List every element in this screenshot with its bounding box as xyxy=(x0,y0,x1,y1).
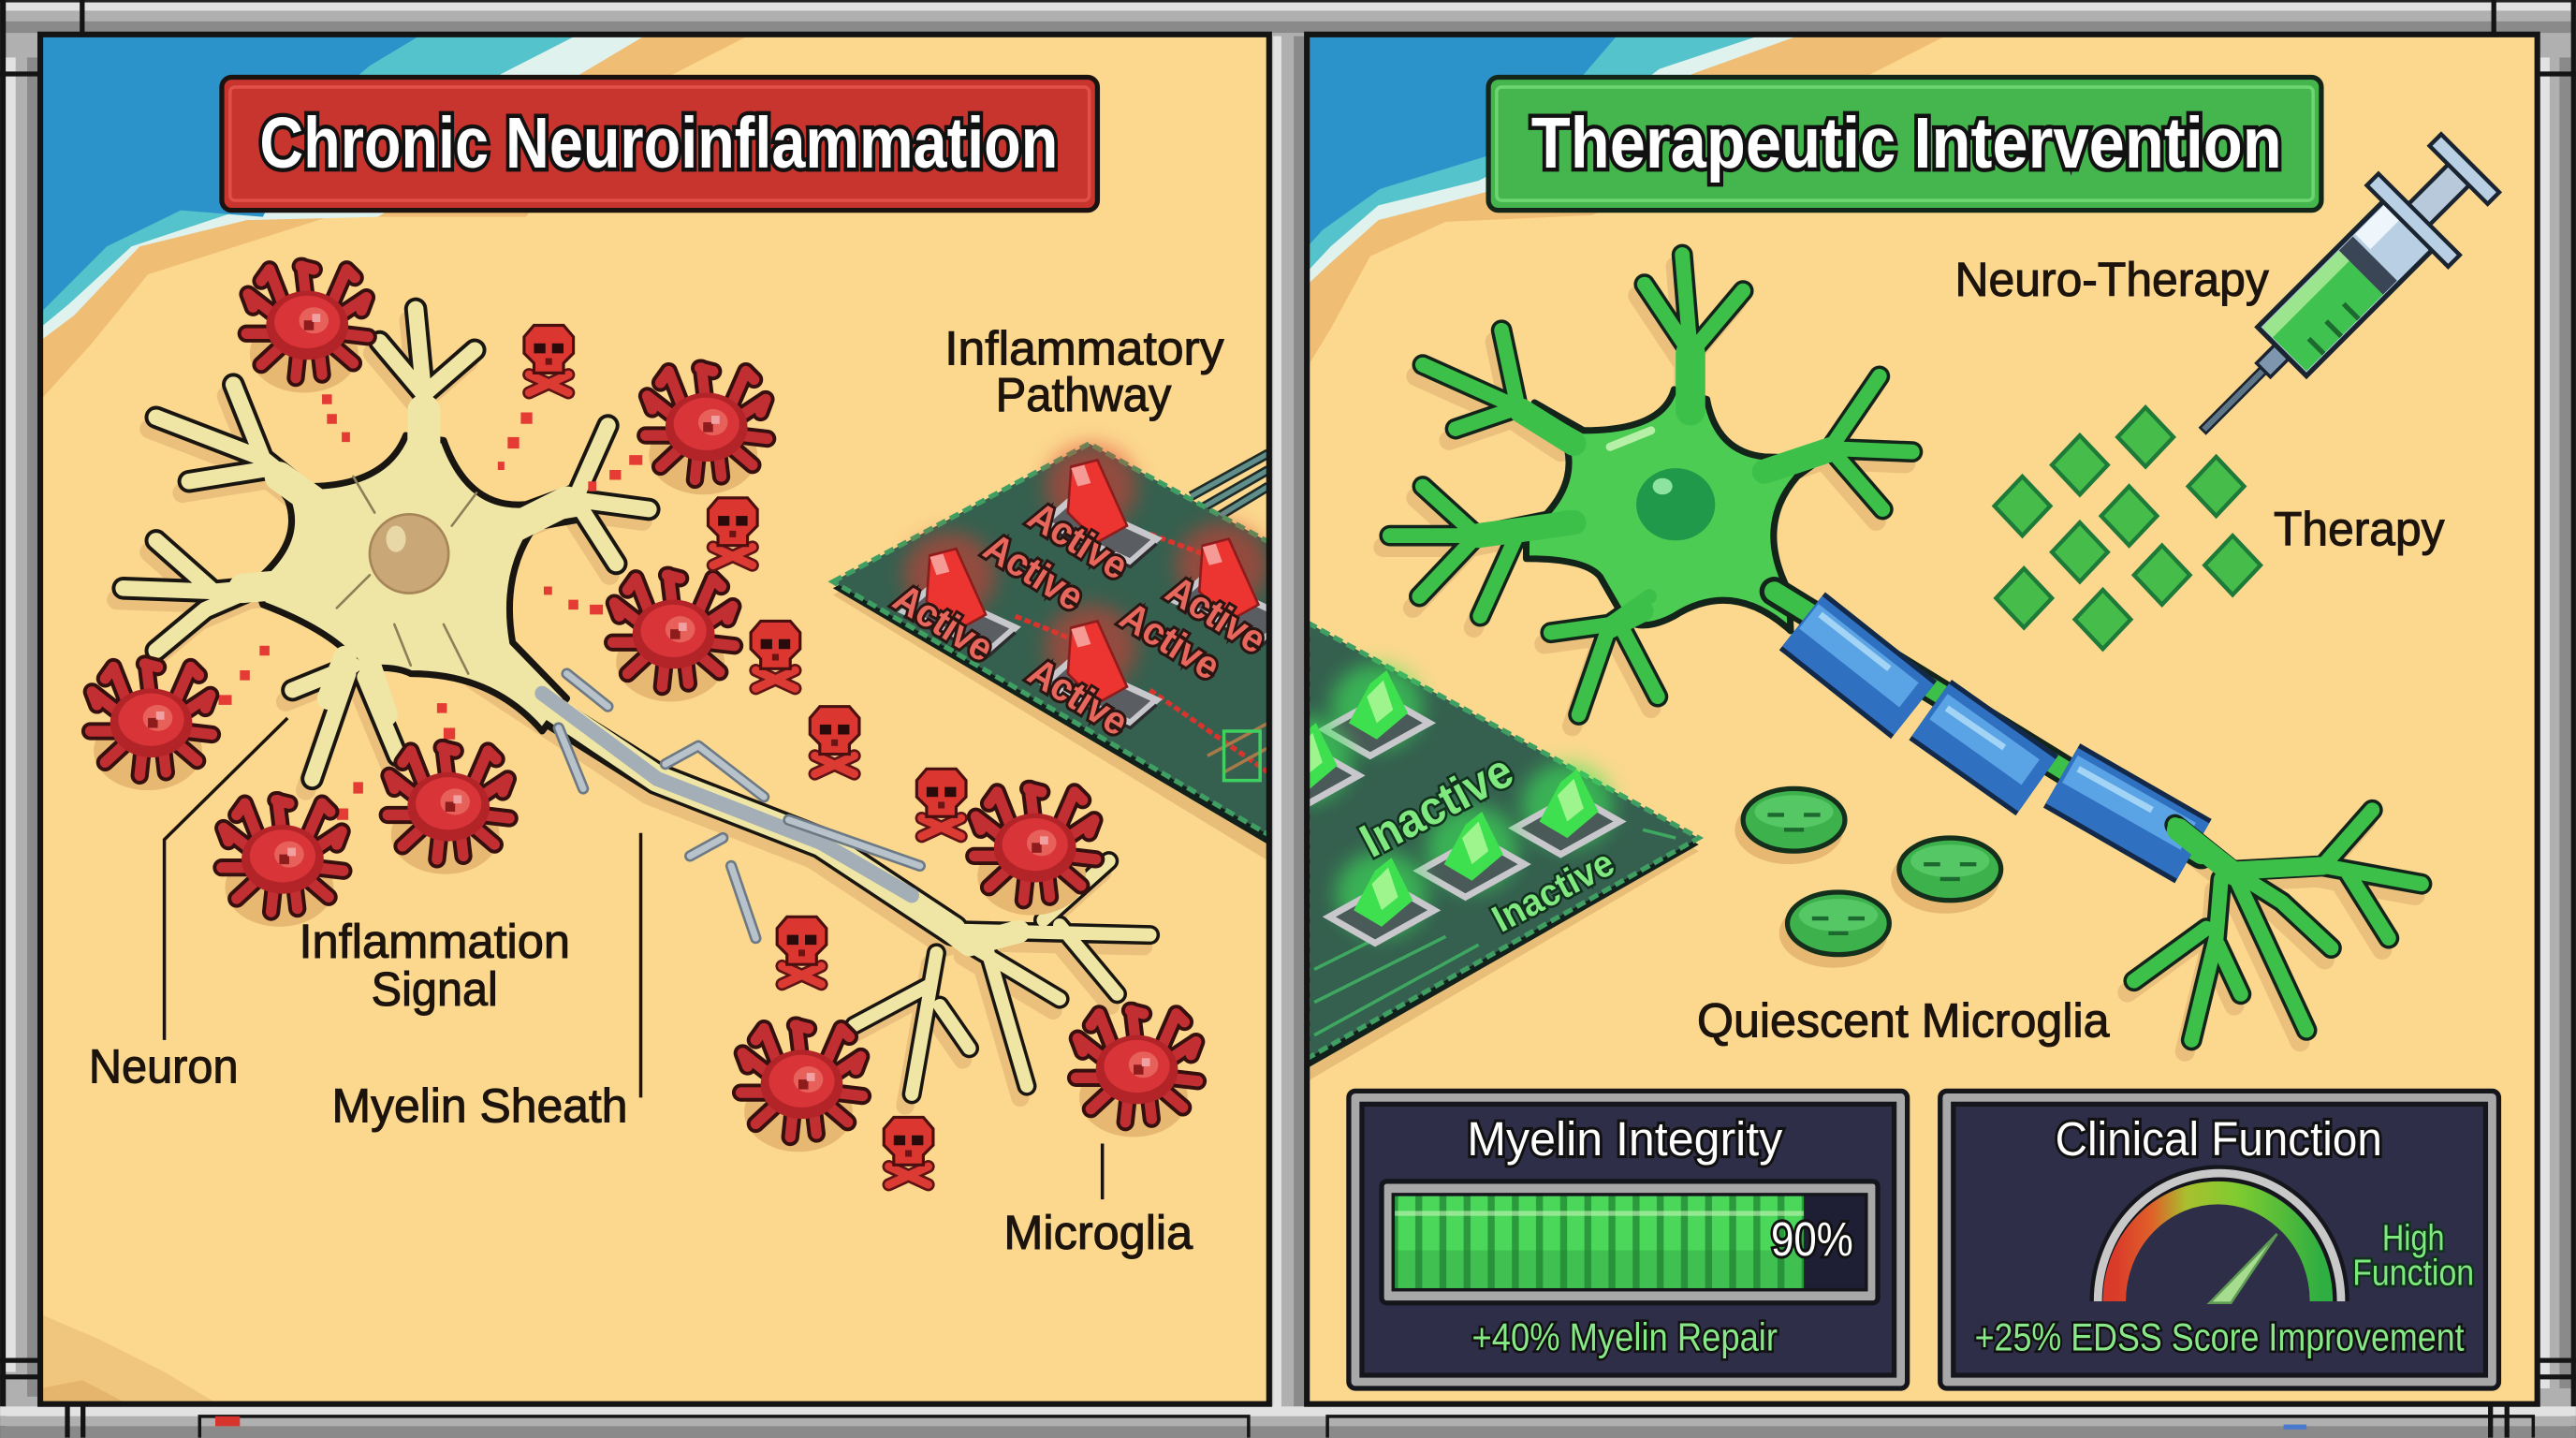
circuit board: inactive pathway xyxy=(1253,623,1699,1081)
panel: chronic neuroinflammation xyxy=(43,37,1266,1401)
active labels: Active xyxy=(886,576,1002,670)
label: inflammatory pathway xyxy=(944,322,1224,421)
inactive labels: Inactive xyxy=(1352,743,1521,868)
label: therapy: Therapy xyxy=(2274,503,2445,556)
myelin sheath segments xyxy=(1802,614,2193,851)
active labels: Active xyxy=(1020,650,1136,744)
damaged neuron xyxy=(117,309,1150,1106)
label: neuro-therapy: Neuro-Therapy xyxy=(1955,253,2269,306)
progress bar xyxy=(1382,1181,1878,1303)
panel: therapeutic intervention xyxy=(1253,37,2535,1401)
nucleus xyxy=(1636,468,1715,540)
leader lines xyxy=(165,718,1103,1199)
high function label: High xyxy=(2382,1219,2445,1259)
gauge xyxy=(2098,1173,2341,1303)
syringe xyxy=(2162,123,2510,471)
title: chronic neuroinflammation xyxy=(222,77,1097,211)
beach water and shore xyxy=(41,37,748,1401)
high function label: Function xyxy=(2352,1253,2474,1293)
circuit board: active inflammatory pathway xyxy=(827,432,1266,859)
active labels: Active xyxy=(1159,567,1274,662)
therapy diamonds xyxy=(1995,407,2261,649)
label: inflammation signal xyxy=(299,915,570,1016)
healthy neuron xyxy=(1383,255,2422,1051)
inflammation signal dots xyxy=(218,394,642,820)
stat panel: myelin integrity: Myelin Integrity xyxy=(1467,1112,1783,1166)
microglia: activated xyxy=(91,266,1197,1152)
skull icons xyxy=(524,325,966,1184)
inactive labels xyxy=(1352,743,1621,940)
label: inflammation signal: Signal xyxy=(372,962,498,1016)
label: quiescent microglia: Quiescent Microglia xyxy=(1697,993,2110,1047)
progress bar: 90% xyxy=(1771,1212,1853,1266)
label: microglia: Microglia xyxy=(1003,1206,1193,1259)
stat panel: myelin integrity xyxy=(1349,1091,1908,1388)
active labels: Active xyxy=(1113,594,1228,688)
active labels: Active xyxy=(1020,493,1136,588)
inactive labels: Inactive xyxy=(1485,841,1621,940)
label: inflammation signal: Inflammation xyxy=(299,915,570,968)
active labels: Active xyxy=(976,524,1091,619)
label: neuron: Neuron xyxy=(89,1040,239,1093)
demyelinated myelin sheath xyxy=(542,674,920,938)
stat panel: clinical function xyxy=(1940,1091,2498,1388)
high function label xyxy=(2352,1219,2474,1293)
label: myelin sheath: Myelin Sheath xyxy=(332,1079,627,1133)
stat panel: clinical function: +25% EDSS Score Improvement xyxy=(1975,1315,2465,1359)
title: chronic neuroinflammation: Chronic Neuroinflammation xyxy=(259,103,1058,183)
nucleus xyxy=(370,514,448,594)
quiescent microglia xyxy=(1734,788,2001,968)
label: inflammatory pathway: Inflammatory xyxy=(944,322,1224,375)
title: therapeutic intervention xyxy=(1488,77,2321,211)
active labels xyxy=(886,493,1274,744)
label: inflammatory pathway: Pathway xyxy=(996,368,1172,421)
beach water and shore xyxy=(1308,37,1945,366)
stat panel: myelin integrity: +40% Myelin Repair xyxy=(1472,1315,1778,1359)
title: therapeutic intervention: Therapeutic Intervention xyxy=(1531,103,2282,183)
axon xyxy=(1774,592,2202,855)
stat panel: clinical function: Clinical Function xyxy=(2056,1112,2382,1166)
